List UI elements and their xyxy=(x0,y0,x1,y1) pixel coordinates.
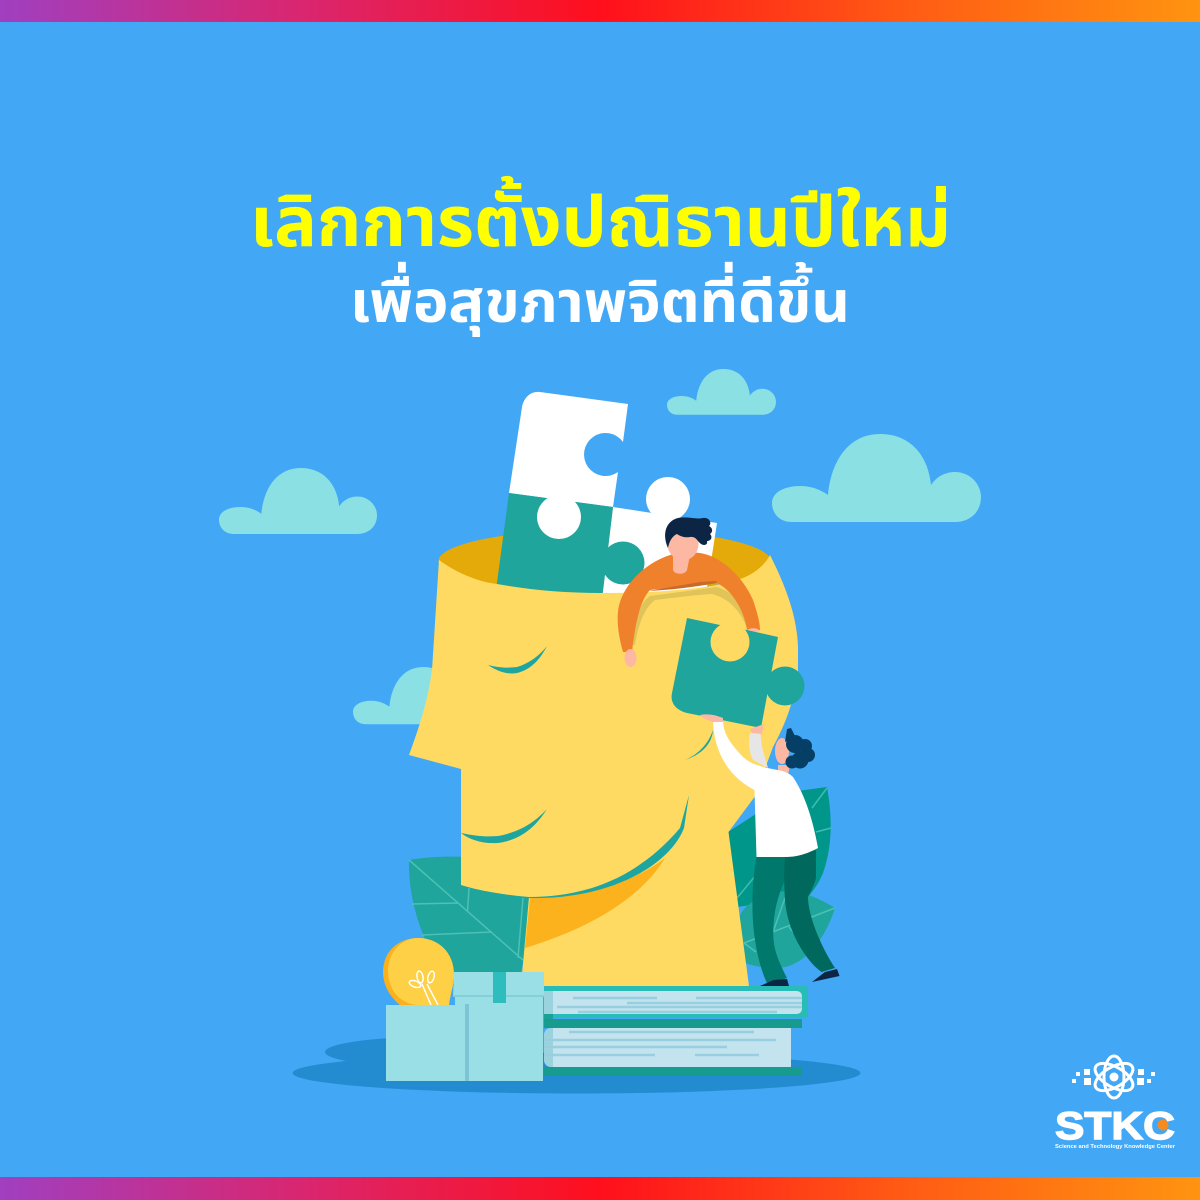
shirt xyxy=(713,721,818,857)
wordmark: STKC xyxy=(1055,1105,1175,1148)
jaw line xyxy=(529,795,689,898)
bottom book cover xyxy=(544,1067,802,1076)
top book spine xyxy=(544,991,553,1014)
title: เลิกการตั้งปณิธานปีใหม่ xyxy=(250,175,951,261)
cloud: top small xyxy=(667,369,776,415)
top book cover xyxy=(544,986,808,1018)
tagline: Science and Technology Knowledge Center xyxy=(1055,1144,1176,1150)
neck xyxy=(778,765,790,775)
puzzle: white right piece xyxy=(602,477,717,600)
neck xyxy=(673,555,690,574)
back arm xyxy=(749,730,768,768)
leaf: right back xyxy=(728,787,831,907)
person climbing xyxy=(700,714,840,986)
chin shadow xyxy=(525,858,665,948)
right hand xyxy=(747,628,760,634)
right leg xyxy=(784,850,835,972)
bottom book spine xyxy=(544,1028,553,1067)
face xyxy=(775,738,789,764)
cloud: left xyxy=(219,468,377,534)
logo xyxy=(1055,1056,1176,1150)
left hand xyxy=(624,649,636,667)
pixel dots xyxy=(1072,1069,1155,1085)
puzzle: held piece xyxy=(672,618,804,728)
cloud: behind head xyxy=(353,667,489,724)
bottom book text lines xyxy=(544,1032,776,1055)
large box xyxy=(453,972,544,1081)
shoes xyxy=(760,969,840,986)
leaf: left xyxy=(409,857,535,985)
top book base xyxy=(544,1019,802,1028)
front hand xyxy=(700,714,723,722)
top gradient bar xyxy=(0,0,1200,22)
book stack xyxy=(544,986,808,1076)
face xyxy=(668,528,698,560)
puzzle: teal piece xyxy=(496,493,644,600)
arm shadow on head xyxy=(633,587,750,645)
small box xyxy=(386,1004,469,1081)
eyelid xyxy=(488,646,547,674)
subtitle: เพื่อสุขภาพจิตที่ดีขึ้น xyxy=(350,261,850,337)
puzzle: white top piece xyxy=(509,392,628,507)
orange dot xyxy=(1158,1120,1168,1130)
hair xyxy=(785,728,815,768)
top book pages xyxy=(553,991,802,1014)
leaf: right front xyxy=(739,891,835,968)
torso and arms xyxy=(618,552,760,652)
light bulb xyxy=(383,938,454,1005)
back hand xyxy=(750,724,764,734)
top book text lines xyxy=(557,998,802,1012)
bottom book pages xyxy=(544,1028,791,1067)
head interior rim xyxy=(438,529,770,593)
head xyxy=(409,555,798,986)
mouth xyxy=(461,809,547,843)
atom icon xyxy=(1091,1056,1137,1098)
shirt fold xyxy=(648,581,717,591)
bottom gradient bar xyxy=(0,1177,1200,1200)
ground shadow xyxy=(292,1037,860,1094)
left leg xyxy=(752,857,793,985)
lid line xyxy=(453,995,544,997)
person on top xyxy=(618,517,760,667)
box lid xyxy=(453,972,544,997)
tape xyxy=(493,972,506,1003)
ear line xyxy=(685,730,713,760)
hair xyxy=(665,517,712,548)
cloud: right large xyxy=(772,434,981,522)
